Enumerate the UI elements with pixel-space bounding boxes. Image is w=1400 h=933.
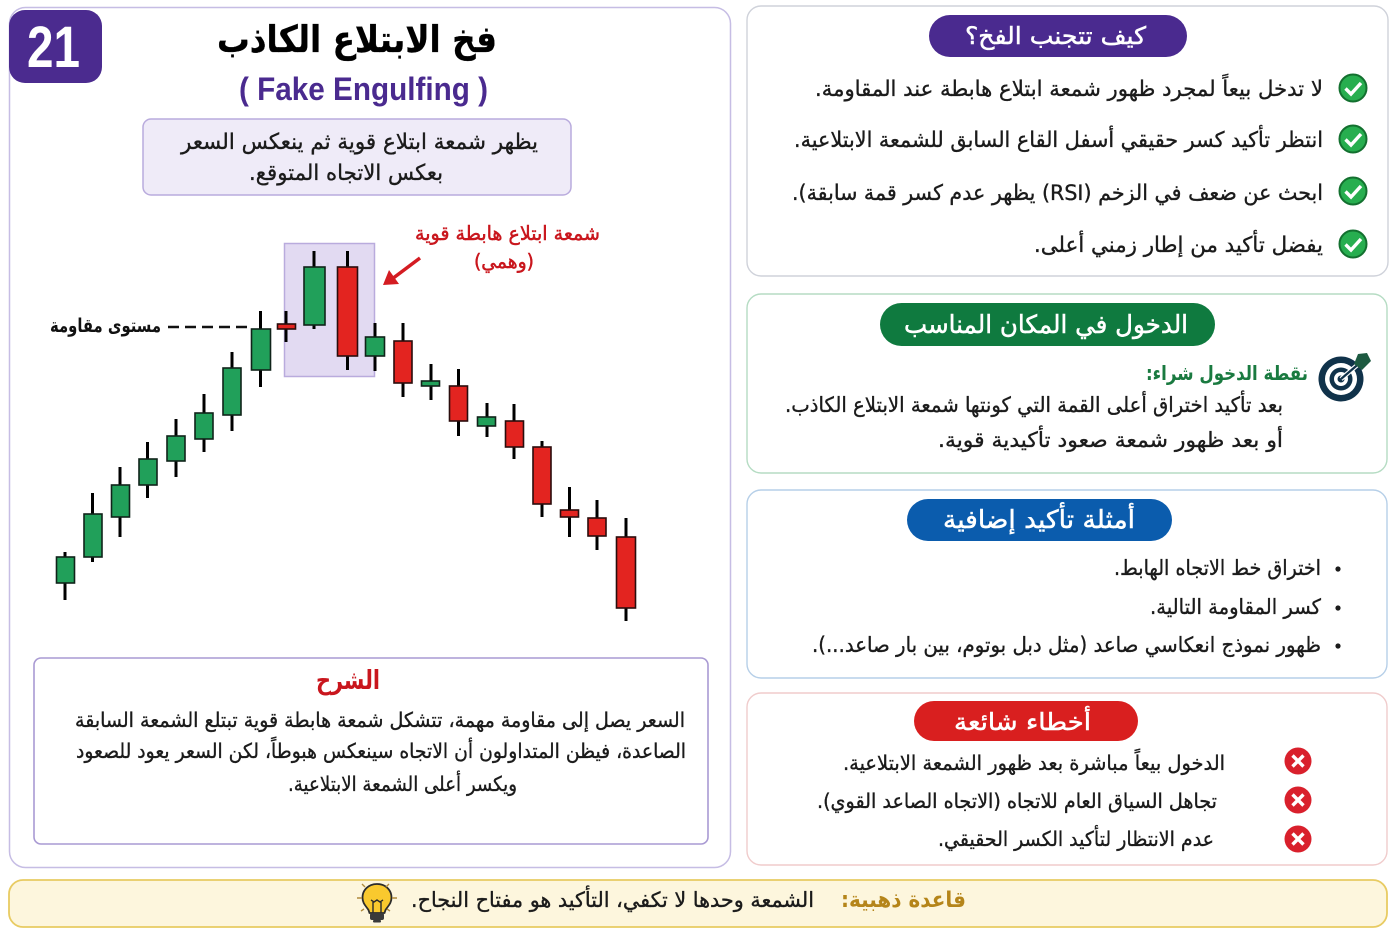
bearish candles falling [366, 323, 636, 621]
title: فخ الابتلاع الكاذب [217, 18, 497, 61]
heading pill [914, 701, 1138, 741]
main left panel [9, 8, 730, 868]
candlestick chart [50, 222, 636, 621]
heading pill: كيف تتجنب الفخ؟ [965, 22, 1147, 50]
heading pill: الدخول في المكان المناسب [904, 310, 1188, 339]
bullet 1: اختراق خط الاتجاه الهابط. [1114, 556, 1321, 580]
entry point label: نقطة الدخول شراء: [1146, 361, 1308, 385]
panel: entering at the right place [747, 294, 1387, 473]
entry point text [785, 390, 1283, 452]
bearish engulfing candle [338, 251, 358, 370]
explanation text: السعر يصل إلى مقاومة مهمة، تتشكل شمعة هابطة قوية تبتلع الشمعة السابقة [75, 708, 685, 733]
bullish candles rising [56, 311, 270, 600]
explanation text: الصاعدة، فيظن المتداولون أن الاتجاه سينعكس هبوطاً، لكن السعر يعود للصعود [76, 736, 686, 763]
icon: light bulb [357, 884, 397, 922]
golden rule label: قاعدة ذهبية: [841, 888, 966, 913]
definition box: يظهر شمعة ابتلاع قوية ثم ينعكس السعر [180, 130, 538, 155]
red arrow to candle [383, 258, 420, 285]
icon: target with arrow [1318, 353, 1371, 402]
golden rule text: الشمعة وحدها لا تكفي، التأكيد هو مفتاح النجاح. [411, 885, 814, 912]
engulfing candle label [415, 222, 600, 273]
mistake 3: عدم الانتظار لتأكيد الكسر الحقيقي. [938, 825, 1214, 851]
panel: common mistakes [747, 693, 1387, 865]
bullet 2: كسر المقاومة التالية. [1150, 595, 1321, 619]
definition box: بعكس الاتجاه المتوقع. [249, 161, 443, 186]
mistake 1: الدخول بيعاً مباشرة بعد ظهور الشمعة الابتلاعية. [843, 748, 1225, 775]
green candle before engulfing [304, 251, 325, 329]
resistance level label: مستوى مقاومة [50, 315, 161, 337]
engulfing candle label: شمعة ابتلاع هابطة قوية [415, 222, 600, 245]
heading pill: أخطاء شائعة [954, 706, 1091, 736]
explanation text [75, 708, 686, 796]
checklist row 3: ابحث عن ضعف في الزخم (RSI) يظهر عدم كسر قمة سابقة). [792, 181, 1323, 206]
checklist row 2: انتظر تأكيد كسر حقيقي أسفل القاع السابق للشمعة الابتلاعية. [794, 125, 1323, 153]
heading pill [907, 499, 1172, 541]
entry point text: بعد تأكيد اختراق أعلى القمة التي كونتها شمعة الابتلاع الكاذب. [785, 390, 1283, 417]
mistake 3 [938, 825, 1312, 852]
engulfing candle label: (وهمي) [474, 250, 534, 273]
number badge [9, 10, 102, 83]
panel: how to avoid the trap [747, 6, 1388, 276]
checklist row 1: لا تدخل بيعاً لمجرد ظهور شمعة ابتلاع هابطة عند المقاومة. [815, 73, 1323, 102]
english subtitle: ( Fake Engulfing ) [239, 71, 488, 107]
panel: extra confirmation examples [747, 490, 1387, 678]
heading pill [880, 303, 1215, 346]
golden rule banner [9, 880, 1387, 927]
checklist row 4: يفضل تأكيد من إطار زمني أعلى. [1034, 230, 1323, 258]
highlight zone [284, 244, 374, 376]
mistake 2: تجاهل السياق العام للاتجاه (الاتجاه الصاعد القوي). [817, 789, 1217, 813]
heading pill: أمثلة تأكيد إضافية [943, 501, 1135, 535]
number badge: 21 [27, 15, 80, 80]
entry point text: أو بعد ظهور شمعة صعود تأكيدية قوية. [938, 425, 1283, 452]
explanation text: ويكسر أعلى الشمعة الابتلاعية. [288, 771, 517, 796]
bullet 3: ظهور نموذج انعكاسي صاعد (مثل دبل بوتوم، بين بار صاعد...). [812, 633, 1321, 658]
explanation heading: الشرح [316, 666, 380, 696]
definition box [143, 119, 571, 195]
small red candle [278, 311, 296, 342]
heading pill [929, 15, 1187, 57]
explanation box [34, 658, 708, 844]
